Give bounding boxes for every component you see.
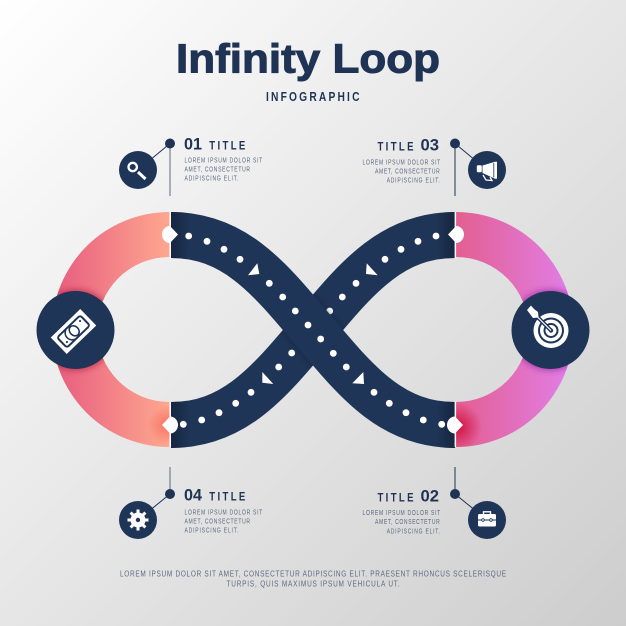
right circle with target icon [510, 289, 592, 371]
dark band: lower left to upper right [171, 235, 455, 425]
icon: magnifier [119, 151, 157, 189]
icon: gear [119, 501, 157, 539]
text block [184, 509, 262, 535]
heading: TITLE [378, 492, 414, 505]
icon: banknote [51, 309, 96, 354]
left arc: coral gradient [52, 212, 169, 447]
text block: AMET, CONSECTETUR [375, 518, 440, 526]
icon: megaphone [468, 151, 506, 189]
number: 04 [184, 487, 203, 505]
heading: TITLE [378, 141, 414, 154]
heading: TITLE [209, 491, 245, 504]
crossing shadow [282, 294, 344, 367]
text block: ADIPISCING ELIT. [184, 527, 239, 535]
footer text: LOREM IPSUM DOLOR SIT AMET, CONSECTETUR ADIPISCING ELIT. PRAESENT RHONCUS SCELERISQUE [120, 569, 506, 579]
text block: AMET, CONSECTETUR [184, 518, 251, 526]
number: 01 [184, 135, 202, 153]
item 03 [362, 137, 506, 196]
item 01 [119, 135, 262, 196]
number: 02 [420, 488, 439, 506]
dark band end shading, lower band [171, 235, 455, 425]
left circle with money icon [34, 289, 116, 371]
text block: ADIPISCING ELIT. [184, 175, 239, 183]
text block [184, 157, 262, 183]
dotted markers under the crossing [180, 233, 439, 428]
text block: LOREM IPSUM DOLOR SIT [362, 509, 440, 517]
text block: ADIPISCING ELIT. [387, 177, 440, 185]
title: Infinity Loop [176, 36, 440, 82]
connector [450, 467, 487, 520]
white separators [170, 212, 456, 447]
number: 03 [420, 137, 439, 155]
text block: LOREM IPSUM DOLOR SIT [184, 509, 262, 517]
footer text [120, 569, 506, 589]
item 02 [362, 467, 506, 539]
connector [138, 138, 175, 196]
text block [362, 509, 440, 536]
icon: target with arrow [527, 306, 568, 348]
footer text: TURPIS, QUIS MAXIMUS IPSUM VEHICULA UT. [226, 579, 400, 589]
subtitle: INFOGRAPHIC [266, 91, 359, 104]
text block: ADIPISCING ELIT. [387, 528, 440, 536]
right arc: pink-violet gradient [456, 212, 573, 447]
connector [138, 467, 175, 520]
text block: AMET, CONSECTETUR [184, 166, 251, 174]
direction arrows [248, 263, 378, 384]
dotted path markers on top band [185, 233, 445, 428]
icon: briefcase [468, 501, 506, 539]
connector [450, 138, 487, 196]
diamond connectors [162, 226, 464, 434]
band end shading, upper band [171, 235, 455, 425]
item 04 [119, 467, 262, 539]
text block: LOREM IPSUM DOLOR SIT [184, 157, 262, 165]
text block [362, 159, 440, 185]
infinity loop diagram [52, 212, 573, 447]
dark band: upper left to lower right [171, 235, 455, 425]
text block: AMET, CONSECTETUR [375, 168, 440, 176]
heading: TITLE [209, 139, 245, 153]
text block: LOREM IPSUM DOLOR SIT [362, 159, 440, 167]
